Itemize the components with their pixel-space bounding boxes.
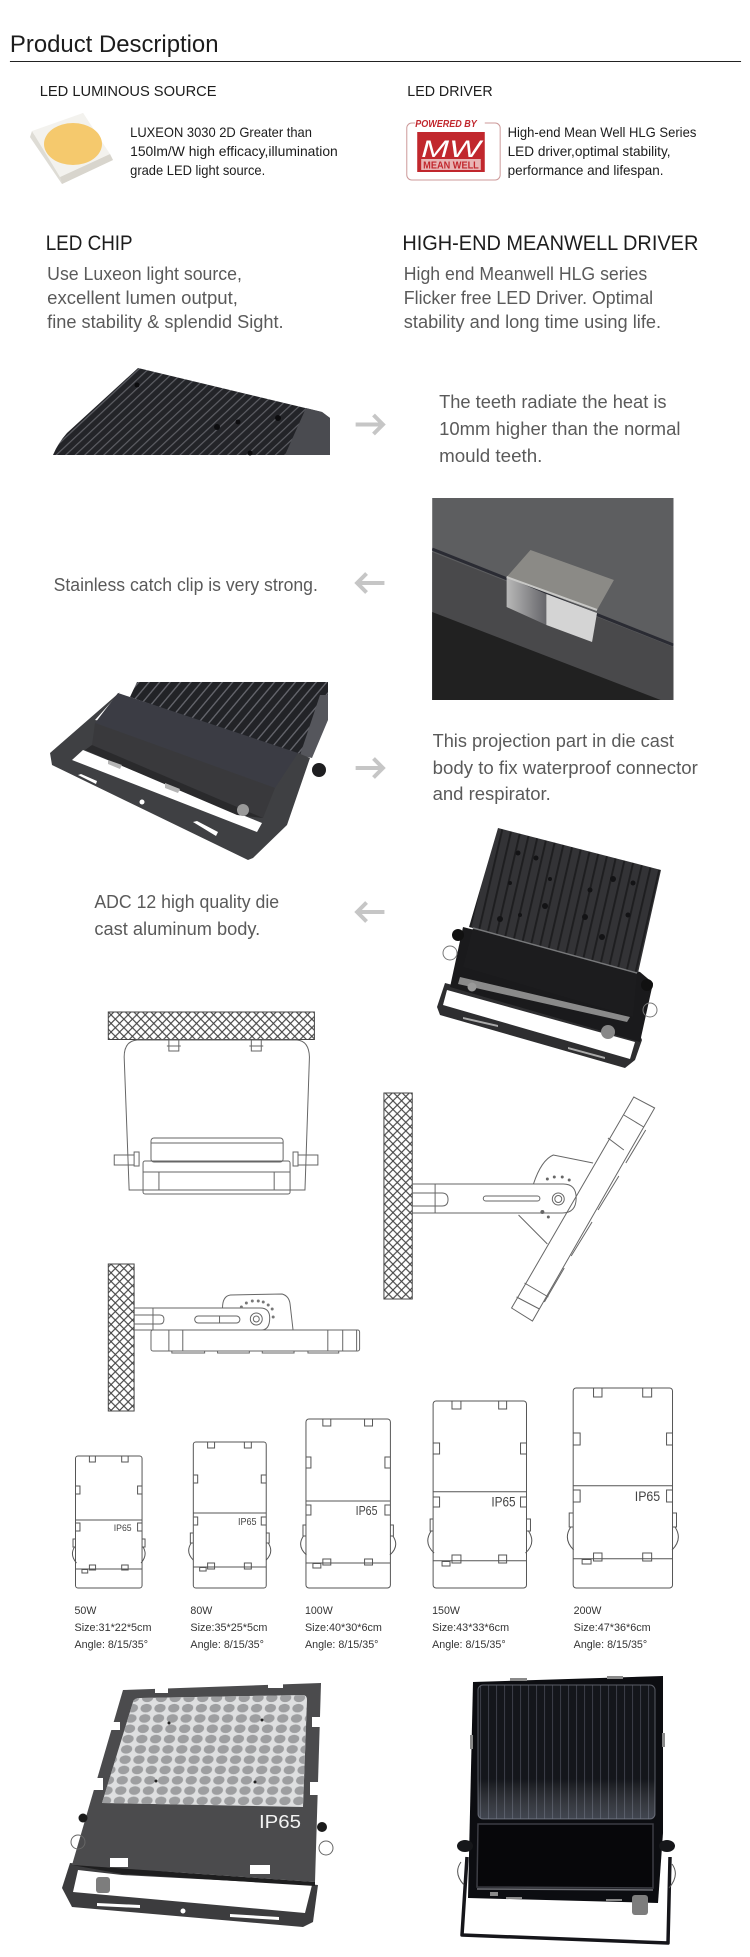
text block: driver description: High-end Mean Well HLG Series (508, 125, 697, 140)
size diagram: 100W: IP65 (356, 1504, 378, 1518)
size diagram: 80W: IP65 (238, 1517, 257, 1528)
bracket (50, 692, 310, 860)
driver box (477, 1824, 653, 1888)
text block: teeth: mould teeth. (439, 446, 542, 466)
text block: teeth: 10mm higher than the normal (439, 419, 680, 439)
heading: LED luminous source: LED LUMINOUS SOURCE (40, 83, 217, 100)
text block: catch clip: Stainless catch clip is very strong. (54, 575, 318, 595)
arrow: left to catch clip text (357, 574, 384, 592)
lens (102, 1695, 307, 1807)
photo: heat sink teeth (53, 368, 330, 456)
text block: luminous source description: LUXEON 3030 2D Greater than (130, 125, 312, 140)
arrow: right to projection text (356, 758, 383, 778)
spec label: 100W: 100W (305, 1605, 333, 1617)
panel: LED driver (407, 83, 700, 180)
text block: driver description: LED driver,optimal stability, (508, 144, 671, 159)
diagram: wall mount angled (384, 1093, 655, 1321)
spec label: 80W: Angle: 8/15/35° (190, 1639, 264, 1651)
arrow: left to body text (357, 902, 384, 922)
photo: flood light front (62, 1682, 333, 1927)
text block: projection part: and respirator. (433, 784, 551, 804)
size diagram: 80W (189, 1442, 271, 1588)
housing (450, 927, 653, 1042)
icon: Mean Well logo: POWERED BY (415, 119, 478, 130)
photo: flood light front: IP65 (259, 1812, 301, 1832)
heading: LED driver: LED DRIVER (407, 83, 493, 100)
text block: ADC 12 body: cast aluminum body. (94, 919, 260, 939)
text block: ADC 12 body: ADC 12 high quality die (94, 892, 279, 912)
text block: Meanwell description: High end Meanwell HLG series (404, 263, 647, 284)
icon: Mean Well logo (407, 116, 500, 180)
spec label: 200W: Size:47*36*6cm (574, 1622, 651, 1634)
spec label: 50W: Angle: 8/15/35° (75, 1639, 148, 1651)
spec label: 100W: Angle: 8/15/35° (305, 1639, 378, 1651)
text block: projection part: This projection part in die cast (433, 731, 674, 751)
spec label: 50W: Size:31*22*5cm (75, 1622, 151, 1634)
spec label: 50W: 50W (75, 1605, 97, 1617)
size diagram: 100W (301, 1419, 396, 1588)
spec label: 200W: Angle: 8/15/35° (574, 1639, 647, 1651)
photo: flood light rear (457, 1676, 675, 1943)
size diagram: 200W: IP65 (635, 1488, 660, 1504)
size diagram: 150W: IP65 (491, 1495, 516, 1510)
photo: die cast body rear (437, 828, 661, 1068)
text block: Meanwell description: stability and long time using life. (404, 311, 661, 332)
text block: Meanwell description: Flicker free LED Driver. Optimal (404, 287, 653, 308)
driver box (95, 693, 298, 788)
size diagram: 50W (72, 1456, 145, 1588)
spec label: 200W: 200W (574, 1605, 602, 1617)
title: Product Description (10, 31, 219, 58)
text block: teeth: The teeth radiate the heat is (439, 392, 667, 412)
text block: LED chip description: fine stability & splendid Sight. (47, 311, 284, 332)
diagram: ceiling mount (108, 1012, 318, 1194)
panel: LED luminous source (30, 83, 341, 184)
panel: LED chip (46, 232, 284, 332)
icon: LED chip (30, 113, 113, 184)
driver box (463, 928, 637, 1017)
arrow: right to teeth text (356, 415, 383, 434)
size diagram: 150W (428, 1401, 532, 1588)
icon: Mean Well logo: MW (421, 136, 484, 163)
icon: Mean Well logo: MEAN WELL (423, 160, 479, 172)
housing (468, 1676, 663, 1903)
spec label: 150W: Angle: 8/15/35° (432, 1639, 506, 1651)
heading: high-end Meanwell driver: HIGH-END MEANWELL DRIVER (402, 232, 698, 255)
heading: LED chip: LED CHIP (46, 232, 133, 255)
clip body (507, 550, 614, 642)
bracket (62, 1863, 318, 1927)
spec label: 80W: Size:35*25*5cm (190, 1622, 267, 1634)
spec label: 150W: 150W (432, 1605, 461, 1617)
size diagram: 200W (567, 1388, 678, 1588)
text block: driver description: performance and lifespan. (508, 163, 664, 178)
text block: projection part: body to fix waterproof connector (433, 758, 698, 778)
diagram: wall mount flat (108, 1264, 360, 1411)
text block: LED chip description: Use Luxeon light source, (47, 263, 242, 284)
bracket (462, 1857, 670, 1943)
spec label: 80W: 80W (190, 1605, 213, 1617)
bracket (437, 983, 642, 1068)
text block: luminous source description: 150lm/W high efficacy,illumination (130, 144, 338, 159)
photo: stainless catch clip (432, 498, 674, 700)
size diagram: 50W: IP65 (114, 1523, 132, 1533)
panel: high-end Meanwell driver (402, 232, 698, 332)
housing (72, 1683, 321, 1882)
spec label: 100W: Size:40*30*6cm (305, 1622, 382, 1634)
text block: LED chip description: excellent lumen output, (47, 287, 238, 308)
text block: luminous source description: grade LED light source. (130, 163, 265, 178)
photo: driver and bracket (50, 682, 328, 860)
spec label: 150W: Size:43*33*6cm (432, 1622, 509, 1634)
